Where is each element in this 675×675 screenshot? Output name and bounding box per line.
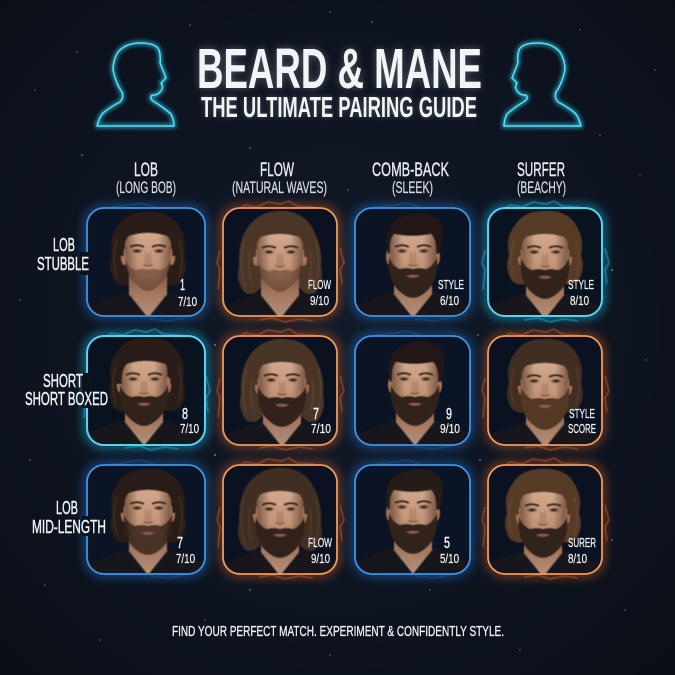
column heading: surfer: (BEACHY)	[517, 178, 566, 197]
card: surfer + stubble: 8/10	[570, 293, 589, 308]
card: surfer + short boxed: SCORE	[568, 421, 596, 436]
card: comb-back + stubble	[345, 203, 481, 322]
column heading: surfer: SURFER	[517, 160, 565, 181]
column heading: lob: LOB	[134, 160, 158, 181]
card: flow + mid-length: 9/10	[311, 551, 330, 566]
column heading: flow: FLOW	[260, 160, 294, 181]
card: surfer + stubble	[477, 201, 613, 323]
card: lob + short boxed	[76, 329, 212, 450]
card: lob + mid-length: 7	[177, 535, 183, 552]
card: lob + stubble: 7/10	[178, 294, 197, 309]
card: lob + short boxed: 7/10	[180, 421, 199, 436]
card: lob + short boxed: 8	[182, 406, 188, 423]
card: surfer + stubble: STYLE	[568, 277, 594, 292]
icon: left neon head silhouette	[97, 43, 174, 126]
card: flow + short boxed: 7	[313, 406, 319, 423]
card: flow + mid-length: FLOW	[308, 535, 332, 550]
column heading: lob: (LONG BOB)	[116, 178, 176, 197]
row label: short boxed: SHORT	[43, 371, 83, 391]
column heading: flow: (NATURAL WAVES)	[232, 178, 327, 197]
row label: lob mid-length	[32, 498, 106, 537]
title: BEARD & MANE	[197, 37, 482, 101]
card: flow + stubble: 9/10	[310, 293, 329, 308]
card: flow + short boxed: 7/10	[311, 421, 331, 436]
row label: lob mid-length: LOB	[56, 498, 78, 518]
card: comb-back + short boxed	[347, 331, 483, 450]
column heading: flow	[232, 160, 327, 197]
card: comb-back + stubble: STYLE	[438, 277, 464, 292]
card: comb-back + mid-length: 5	[444, 535, 450, 552]
column heading: comb-back	[372, 160, 449, 197]
footer tagline: FIND YOUR PERFECT MATCH. EXPERIMENT & CONFIDENTLY STYLE.	[172, 623, 504, 640]
row label: lob mid-length: MID-LENGTH	[32, 517, 106, 537]
card: lob + stubble: 1	[180, 277, 185, 294]
card: comb-back + mid-length	[345, 460, 481, 578]
row label: short boxed	[25, 371, 108, 409]
card: lob + stubble	[80, 203, 216, 322]
card: flow + mid-length	[212, 458, 348, 580]
row label: lob stubble: LOB	[53, 235, 75, 255]
card: surfer + short boxed: STYLE	[569, 406, 595, 421]
card: lob + mid-length: 7/10	[176, 551, 195, 566]
card: flow + short boxed	[214, 329, 350, 451]
card: comb-back + short boxed: 9/10	[440, 421, 460, 436]
card: comb-back + stubble: 6/10	[440, 293, 459, 308]
icon: right neon head silhouette	[504, 43, 581, 126]
column heading: lob	[116, 160, 176, 197]
card: comb-back + mid-length: 5/10	[440, 551, 459, 566]
card: flow + stubble: FLOW	[308, 277, 331, 292]
column heading: comb-back: (SLEEK)	[392, 178, 433, 197]
column heading: comb-back: COMB-BACK	[372, 160, 449, 181]
card: surfer + mid-length: 8/10	[568, 551, 587, 566]
row label: lob stubble: STUBBLE	[37, 254, 89, 274]
card: surfer + short boxed	[477, 329, 613, 452]
card: surfer + mid-length: SURER	[568, 535, 596, 550]
row label: short boxed: SHORT BOXED	[25, 389, 108, 409]
card: lob + mid-length	[80, 460, 216, 579]
column heading: surfer	[517, 160, 566, 197]
card: flow + stubble	[212, 201, 348, 323]
row label: lob stubble	[37, 235, 92, 275]
card: comb-back + short boxed: 9	[446, 406, 452, 423]
subtitle: THE ULTIMATE PAIRING GUIDE	[201, 92, 477, 124]
card: surfer + mid-length	[475, 458, 611, 581]
